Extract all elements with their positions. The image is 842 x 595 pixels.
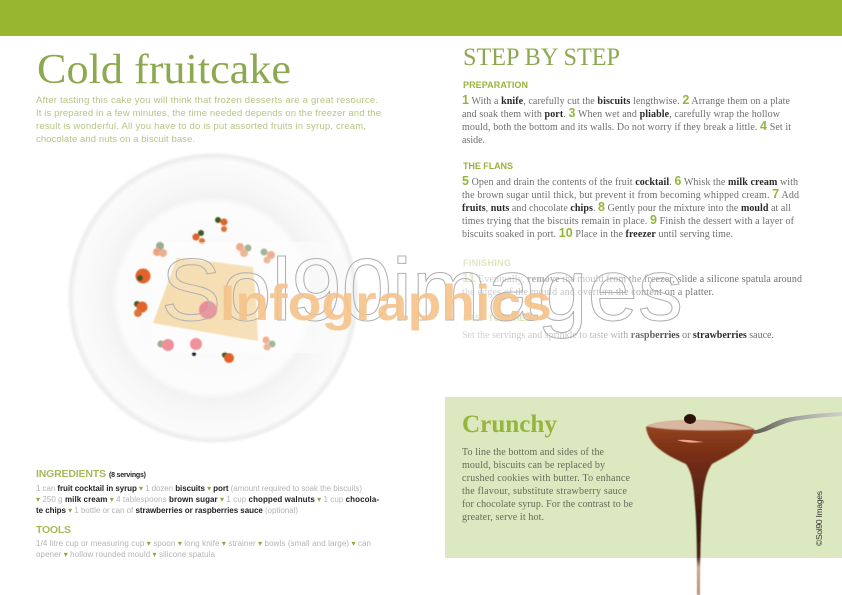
finishing text: 11 Eventually, remove the mould from the freezer, slide a silicone spatula around bbox=[462, 271, 802, 285]
preparation text: 1 With a knife, carefully cut the biscuits lengthwise. 2 Arrange them on a plate bbox=[462, 93, 791, 107]
sauce bowl and stream bbox=[646, 421, 755, 595]
the flans text: times trying that the biscuits remain in place. 9 Finish the dessert with a layer of bbox=[462, 213, 795, 227]
ingredients heading: INGREDIENTS bbox=[36, 468, 106, 480]
the flans heading: THE FLANS bbox=[463, 161, 513, 171]
the flans text: the brown sugar until thick, but prevent it from becoming whipped cream. 7 Add bbox=[462, 187, 799, 201]
ingredients heading bbox=[36, 468, 146, 480]
crunchy text: the flavour, substitute strawberry sauce bbox=[462, 486, 628, 497]
preparation text: aside. bbox=[462, 135, 485, 146]
ingredients heading: (8 servings) bbox=[109, 472, 146, 479]
copyright: ©Sol90 Images bbox=[814, 491, 824, 546]
spoon with chocolate sauce bbox=[646, 412, 842, 595]
preparation text: and soak them with port. 3 When wet and pliable, carefully wrap the hollow bbox=[462, 106, 781, 120]
crunchy text: for chocolate syrup. For the contrast to be bbox=[462, 499, 634, 510]
intro text: After tasting this cake you will think that frozen desserts are a great resource. bbox=[36, 95, 378, 106]
plate bbox=[70, 155, 356, 441]
photo: plate with fruitcake bbox=[68, 153, 358, 443]
top green band bbox=[0, 0, 842, 36]
intro text: It is prepared in a few minutes, the time needed depends on the freezer and the bbox=[36, 108, 381, 119]
step by step heading: STEP BY STEP bbox=[463, 44, 620, 71]
ingredients list: ▾ 250 g milk cream ▾ 4 tablespoons brown sugar ▾ 1 cup chopped walnuts ▾ 1 cup chocola- bbox=[36, 495, 379, 504]
intro text bbox=[36, 95, 381, 145]
crunchy text: To line the bottom and sides of the bbox=[462, 447, 605, 458]
finishing heading: FINISHING bbox=[463, 258, 511, 268]
intro text: chocolate and nuts on a biscuit base. bbox=[36, 134, 195, 145]
tools list: 1/4 litre cup or measuring cup ▾ spoon ▾ long knife ▾ strainer ▾ bowls (small and large) ▾ can bbox=[36, 539, 371, 548]
last touches heading: LAST TOUCHES bbox=[463, 313, 531, 323]
crunchy text: greater, serve it hot. bbox=[462, 512, 544, 523]
finishing text: the edges of the mould and overturn the content on a platter. bbox=[462, 287, 714, 298]
preparation text: mould, both the bottom and its walls. Do not worry if they break a little. 4 Set it bbox=[462, 119, 791, 133]
ingredients list: te chips ▾ 1 bottle or can of strawberries or raspberries sauce (optional) bbox=[36, 506, 298, 515]
the flans text: biscuits soaked in port. 10 Place in the freezer until serving time. bbox=[462, 226, 733, 240]
the flans text: 5 Open and drain the contents of the fruit cocktail. 6 Whisk the milk cream with bbox=[462, 174, 798, 188]
last touches text: Set the servings and sprinkle to taste with raspberries or strawberries sauce. bbox=[462, 330, 774, 341]
cake slice bbox=[153, 258, 258, 341]
highlight bbox=[677, 440, 704, 443]
watermark: Sol90images: Sol90images bbox=[161, 240, 683, 339]
tools list bbox=[36, 539, 371, 559]
intro text: result is wonderful. All you have to do is put assorted fruits in syrup, cream, bbox=[36, 121, 366, 132]
pink fruit on cake bbox=[199, 301, 217, 319]
crunchy text: crushed cookies with butter. To enhance bbox=[462, 473, 631, 484]
preparation text bbox=[462, 93, 791, 146]
crunchy text: mould, biscuits can be replaced by bbox=[462, 460, 605, 471]
crunchy heading: Crunchy bbox=[462, 411, 557, 438]
white veil over the photo bbox=[152, 242, 352, 353]
cherry bbox=[684, 414, 696, 424]
panel: crunchy bbox=[445, 397, 842, 595]
ingredients list: 1 can fruit cocktail in syrup ▾ 1 dozen biscuits ▾ port (amount required to soak the biscuits) bbox=[36, 484, 362, 493]
finishing text bbox=[462, 271, 802, 298]
fruit garnish bbox=[134, 217, 276, 363]
cream top bbox=[646, 420, 755, 431]
ingredients list bbox=[36, 484, 379, 515]
spoon handle bbox=[752, 412, 842, 434]
title: Cold fruitcake bbox=[37, 47, 291, 93]
crunchy text bbox=[462, 447, 634, 523]
white veil over the right text bbox=[445, 254, 700, 346]
watermark: Infographics: Infographics bbox=[220, 275, 552, 331]
tools heading: TOOLS bbox=[36, 524, 71, 536]
tools list: opener ▾ hollow rounded mould ▾ silicone spatula bbox=[36, 550, 216, 559]
the flans text: fruits, nuts and chocolate chips. 8 Gently pour the mixture into the mould at all bbox=[462, 200, 791, 214]
the flans text bbox=[462, 174, 799, 240]
preparation heading: PREPARATION bbox=[463, 80, 528, 90]
